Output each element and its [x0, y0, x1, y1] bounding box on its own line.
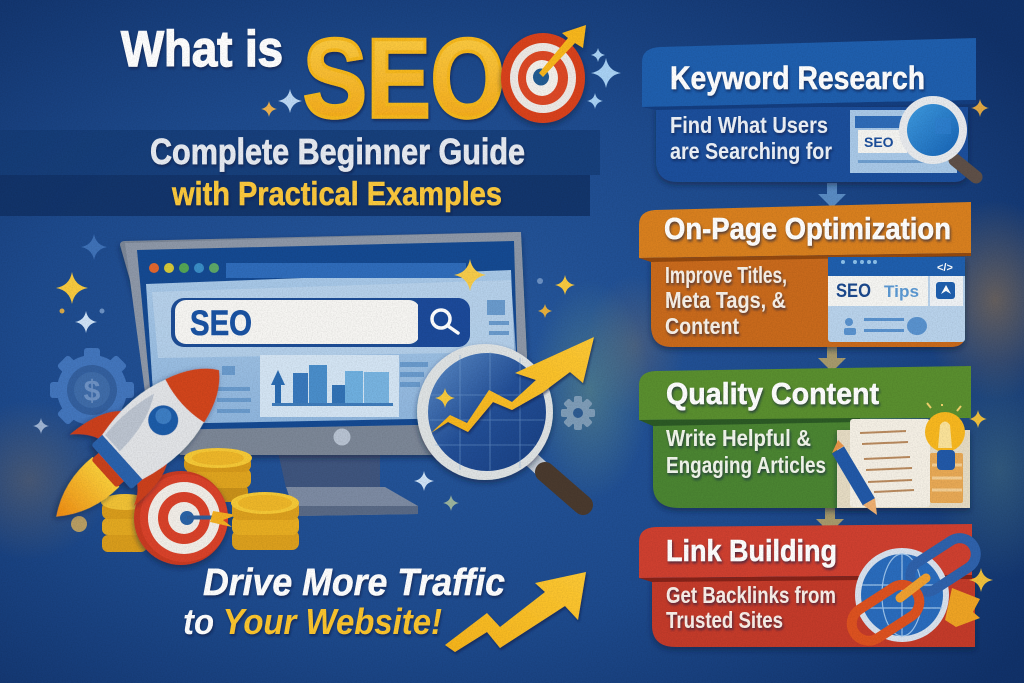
- monitor button: [334, 428, 350, 446]
- icon: seo page with magnifier: [850, 96, 976, 177]
- description: [665, 262, 787, 339]
- front coin stack: [231, 492, 299, 550]
- decorative sparkles left illustration: [33, 234, 575, 532]
- rocket window: [142, 399, 184, 442]
- arrow: keyword to on-page: [818, 183, 846, 208]
- description: are Searching for: [670, 138, 832, 164]
- icon: document, notes, pencil and bulb: [832, 403, 970, 515]
- icon: title target with arrow: [501, 25, 586, 123]
- heading words: What is: What is: [121, 21, 283, 77]
- monitor screen: [137, 241, 519, 430]
- icon: small gear: [561, 396, 595, 430]
- title: What is SEO: [121, 16, 621, 141]
- rocket body: [99, 373, 210, 484]
- icon: large gear with dollar sign: [50, 348, 134, 432]
- icon: globe with chain links: [845, 532, 982, 647]
- magnifier handle: [530, 458, 583, 505]
- arrow: tagline trend: [445, 572, 586, 652]
- growth arrow: [431, 337, 594, 433]
- search bar: [171, 298, 470, 347]
- browser tab bar: [226, 263, 466, 278]
- description: Content: [665, 313, 739, 339]
- subtitle line 2: with Practical Examples: [171, 175, 502, 212]
- magnifier lens: [417, 344, 553, 480]
- heading word: SEO: SEO: [303, 16, 505, 141]
- icon: browser mockup: Tips: [884, 282, 919, 301]
- magnifier with growth arrow: [417, 337, 594, 505]
- browser dots: [149, 263, 219, 273]
- rocket fins: [70, 396, 130, 454]
- heading: Keyword Research: [670, 60, 925, 96]
- icon: browser mockup: [828, 257, 965, 342]
- icon: search: [432, 310, 458, 333]
- description: Get Backlinks from: [666, 582, 836, 608]
- description: Trusted Sites: [666, 607, 783, 633]
- coin stacks: [101, 448, 252, 552]
- description: [666, 425, 826, 478]
- tagline line 1: Drive More Traffic: [203, 562, 505, 604]
- pencil: [838, 450, 869, 502]
- back coin stack: [184, 448, 252, 502]
- panel: quality content: [639, 366, 987, 515]
- description: Improve Titles,: [665, 262, 787, 288]
- description: Write Helpful &: [666, 425, 811, 451]
- panel: keyword research: [642, 38, 989, 182]
- search bar: SEO: [190, 304, 252, 343]
- rocket: [21, 331, 249, 550]
- side content blocks: [215, 300, 509, 413]
- sparkles around title: [261, 48, 621, 117]
- rocket nose: [162, 349, 238, 425]
- arrow: on-page to content: [818, 347, 846, 372]
- description: Find What Users: [670, 112, 828, 138]
- rocket flame: [43, 457, 119, 532]
- icon: seo page with magnifier: SEO: [864, 134, 894, 150]
- light bulb: [925, 412, 965, 452]
- heading: On-Page Optimization: [664, 211, 951, 246]
- icon: browser mockup: SEO: [836, 281, 871, 302]
- tagline: [183, 562, 505, 642]
- description: [670, 112, 832, 164]
- description: Meta Tags, &: [665, 287, 786, 313]
- heading: Link Building: [666, 533, 837, 568]
- panel: on-page optimization: [639, 202, 971, 347]
- monitor stand: [278, 452, 418, 516]
- heading: Quality Content: [666, 376, 879, 411]
- target with arrow: [134, 471, 237, 565]
- tagline line 2: to Your Website!: [183, 601, 442, 642]
- bar chart: [260, 355, 399, 417]
- monitor frame: [120, 232, 532, 455]
- rocket nozzle: [91, 451, 126, 488]
- arrow: content to links: [816, 508, 844, 533]
- description: Engaging Articles: [666, 452, 826, 478]
- subtitle line 1: Complete Beginner Guide: [150, 131, 525, 172]
- monitor: [120, 232, 532, 516]
- left coin stack: [101, 494, 149, 552]
- icon: large gear with dollar sign: $: [84, 375, 101, 408]
- panel: link building: [639, 524, 993, 647]
- icon: browser mockup: </>: [937, 262, 953, 274]
- subtitle bands: [0, 130, 600, 216]
- description: [666, 582, 836, 633]
